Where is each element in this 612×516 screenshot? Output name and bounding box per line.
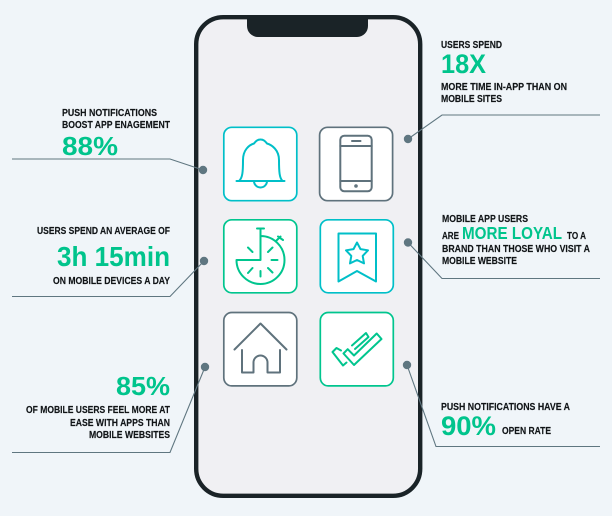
stat: 90% open rate: PUSH NOTIFICATIONS HAVE A <box>441 402 570 413</box>
leader line <box>12 159 207 174</box>
stat: push notifications 88% <box>12 108 207 174</box>
phone body <box>196 16 420 496</box>
stat: more loyal: BRAND THAN THOSE WHO VISIT A <box>442 244 590 255</box>
card: smartphone icon <box>320 127 393 201</box>
stat: 90% open rate: OPEN RATE <box>502 426 551 437</box>
leader line <box>12 363 209 452</box>
stat: 18X: MORE TIME IN-APP THAN ON <box>441 82 567 93</box>
card: stopwatch icon <box>224 220 297 293</box>
stat: 3h 15min: ON MOBILE DEVICES A DAY <box>53 276 170 287</box>
stat: 18X: USERS SPEND <box>441 40 502 51</box>
stat: 18X: MOBILE SITES <box>441 94 502 105</box>
stat: 85%: EASE WITH APPS THAN <box>70 418 170 429</box>
card: double check icon <box>320 312 393 386</box>
stat: more loyal: MOBILE WEBSITE <box>442 256 517 267</box>
stat: 85%: OF MOBILE USERS FEEL MORE AT <box>26 405 171 416</box>
card: bell icon <box>224 127 297 201</box>
leader line <box>403 361 600 446</box>
stat: 90% open rate: 90% <box>441 411 496 441</box>
leader line <box>12 257 208 296</box>
stat: more loyal: MOBILE APP USERS <box>442 214 528 225</box>
stat: 3h 15min: USERS SPEND AN AVERAGE OF <box>37 226 170 237</box>
leader line <box>404 115 600 143</box>
stat: 90% open rate <box>403 361 600 446</box>
stat: 18X: 18X <box>441 49 486 79</box>
card: house icon <box>224 312 297 386</box>
stat: more loyal: ARE <box>442 231 459 242</box>
stat: 85% <box>12 363 209 452</box>
stat: push notifications 88%: PUSH NOTIFICATIONS <box>62 108 157 119</box>
card: bookmark star icon <box>320 220 393 293</box>
stat: 18X <box>404 40 600 143</box>
stat: more loyal: MORE LOYAL <box>462 223 562 243</box>
stat: push notifications 88%: 88% <box>62 131 118 161</box>
stat: 3h 15min <box>12 226 208 296</box>
phone notch <box>247 16 368 37</box>
stat: more loyal <box>404 214 600 278</box>
stat: more loyal: TO A <box>567 231 586 242</box>
leader line <box>404 238 600 278</box>
stat: 3h 15min: 3h 15min <box>57 241 170 272</box>
stat: push notifications 88%: BOOST APP ENAGEMENT <box>62 120 171 131</box>
stat: 85%: MOBILE WEBSITES <box>89 430 170 441</box>
stat: 85%: 85% <box>116 371 170 401</box>
